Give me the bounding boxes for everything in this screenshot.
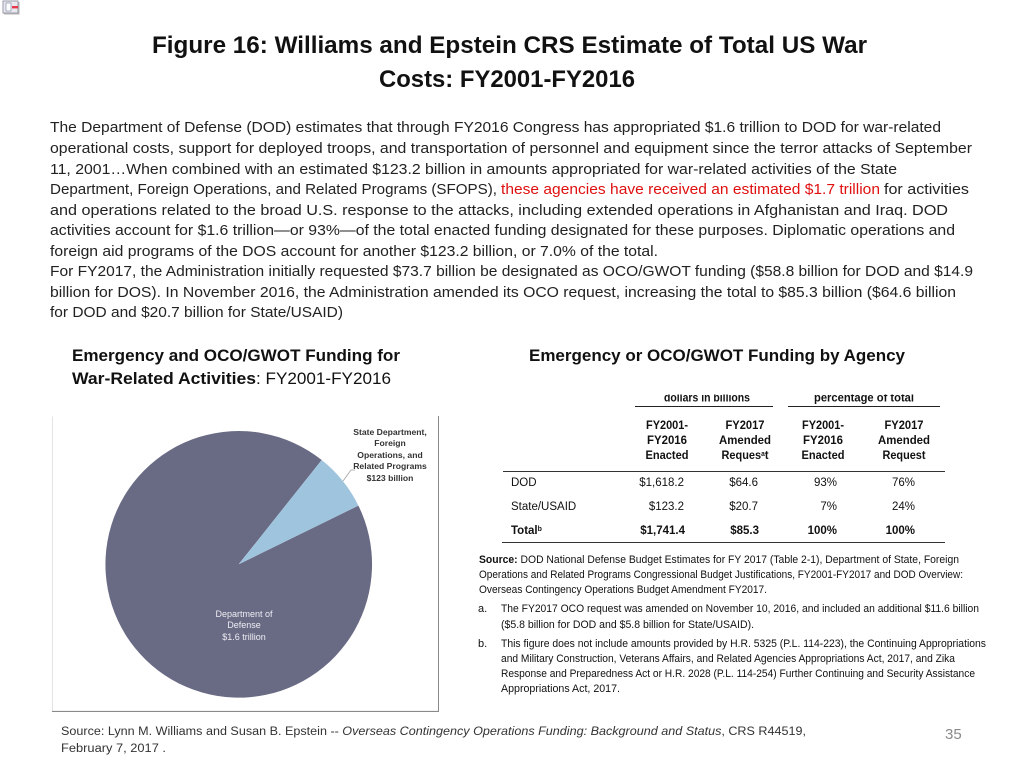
table row: Total <box>511 525 915 537</box>
label: State Department: Operations, and <box>357 450 423 460</box>
body text block: and operations related to the broad U.S. response to the attacks, including extended operations in Afghanistan and Iraq. DOD <box>50 203 948 219</box>
table column headers <box>646 420 930 462</box>
body text block: 11, 2001…When combined with an estimated $123.2 billion in amounts appropriated for war-related activities of the State <box>50 162 897 178</box>
label: State Department: State Department, <box>353 427 427 437</box>
label: Department of Defense: Department of <box>215 609 273 619</box>
title: Costs: FY2001-FY2016 <box>379 66 635 93</box>
table column headers: FY2016 <box>647 435 687 447</box>
table source notes: Response and Preparedness Act or H.R. 2028 (P.L. 114-254) Further Continuing and Security Assistance <box>501 668 975 680</box>
table source notes: Source: DOD National Defense Budget Estimates for FY 2017 (Table 2-1), Department of State, Foreign <box>479 554 959 566</box>
table source notes: ($5.8 billion for DOD and $5.8 billion for State/USAID). <box>501 619 754 631</box>
label: State Department <box>353 427 427 483</box>
title: Figure 16: Williams and Epstein CRS Estimate of Total US War <box>152 32 867 59</box>
table row: Total: 100% <box>808 525 837 537</box>
panel: pie chart <box>52 416 439 712</box>
body text block: for DOD and $20.7 billion for State/USAID) <box>50 305 343 321</box>
body text block: billion for DOS). In November 2016, the Administration amended its OCO request, increasing the total to $85.3 billion ($64.6 billion <box>50 285 956 301</box>
table source notes <box>478 554 986 695</box>
table source notes: and Military Construction, Veterans Affairs, and Related Agencies Appropriations Act, 2017, and Zika <box>501 653 956 665</box>
table row: State/USAID: $123.2 <box>649 501 684 513</box>
heading: agency table: Emergency or OCO/GWOT Funding by Agency <box>529 346 906 365</box>
table row: State/USAID: State/USAID <box>511 501 576 513</box>
pie slice: Department of Defense <box>105 431 372 698</box>
body text block: for activities <box>884 182 969 198</box>
footer source citation: February 7, 2017 . <box>61 743 166 755</box>
panel: funding table <box>502 392 945 542</box>
table row: DOD: 76% <box>892 477 915 489</box>
table column headers: FY2001- <box>802 420 844 432</box>
heading: pie chart: : FY2001-FY2016 <box>256 369 391 388</box>
table row: Total: $1,741.4 <box>640 525 686 537</box>
table row: DOD <box>511 477 915 489</box>
body text block: these agencies have received an estimated $1.7 trillion <box>501 182 880 198</box>
table column headers: FY2001- <box>646 420 688 432</box>
heading: pie chart: Emergency and OCO/GWOT Funding for <box>72 346 400 365</box>
table source notes: Operations and Related Programs Congressional Budget Justifications, FY2001-FY2017 and DOD Overview: <box>479 569 963 581</box>
table source notes: b. <box>478 638 487 650</box>
table column headers: t <box>765 450 769 462</box>
body text block: operational costs, support for deployed troops, and transportation of personnel and equipment since the terror attacks of September <box>50 141 972 157</box>
table column headers: Enacted <box>646 450 688 462</box>
body text block: Department, Foreign Operations, and Related Programs (SFOPS), <box>50 182 497 198</box>
label: State Department: Foreign <box>374 438 406 448</box>
label: State Department: Related Programs <box>353 461 427 471</box>
footer source citation <box>61 726 806 755</box>
body text block: The Department of Defense (DOD) estimates that through FY2016 Congress has appropriated $1.6 trillion to DOD for war-related <box>50 120 941 136</box>
table source notes: The FY2017 OCO request was amended on November 10, 2016, and included an additional $11.6 billion <box>501 603 979 615</box>
table row: DOD: 93% <box>814 477 837 489</box>
label: State Department: $123 billion <box>367 473 413 483</box>
label: Department of Defense: Defense <box>227 620 261 630</box>
page number: 35 <box>945 726 962 743</box>
table group headers: dollars in billions <box>664 392 750 404</box>
table source notes: a. <box>478 603 487 615</box>
table column headers: Reques <box>722 450 763 462</box>
table column headers: Request <box>882 450 926 462</box>
table source notes: Overseas Contingency Operations Budget Amendment FY2017. <box>479 584 767 596</box>
table group headers: percentage of total <box>814 392 914 404</box>
table row: Total: 100% <box>886 525 915 537</box>
table row: State/USAID <box>511 501 915 513</box>
table row: State/USAID: 24% <box>892 501 915 513</box>
table column headers: FY2017 <box>884 420 924 432</box>
table column headers: FY2016 <box>803 435 843 447</box>
heading: pie chart: War-Related Activities <box>72 369 256 388</box>
table row: Total: b <box>538 526 542 533</box>
table row: DOD: $64.6 <box>729 477 758 489</box>
footer source citation: Source: Lynn M. Williams and Susan B. Epstein -- Overseas Contingency Operations Funding: Background and Status , CRS R44519, <box>61 726 806 738</box>
table row: State/USAID: 7% <box>820 501 837 513</box>
table column headers: Amended <box>719 435 771 447</box>
table row: DOD: $1,618.2 <box>639 477 684 489</box>
pie slice: State Department <box>239 460 358 564</box>
table column headers: Enacted <box>802 450 844 462</box>
label: Department of Defense <box>215 609 273 642</box>
body text block: activities account for $1.6 trillion—or 93%—of the total enacted funding designated for these purposes. Diplomatic operations and <box>50 223 955 239</box>
table source notes: This figure does not include amounts provided by H.R. 5325 (P.L. 114-223), the Continuing Appropriations <box>501 638 986 650</box>
table group headers <box>635 394 940 407</box>
body text block: foreign aid programs of the DOS account for another $123.2 billion, or 7.0% of the total. <box>50 244 658 260</box>
table column headers: FY2017 <box>726 420 764 432</box>
leader line <box>343 470 355 481</box>
table row: State/USAID: $20.7 <box>729 501 758 513</box>
heading: pie chart <box>72 346 400 388</box>
table row: DOD: DOD <box>511 477 537 489</box>
label: Department of Defense: $1.6 trillion <box>222 632 266 642</box>
table column headers: a <box>761 451 765 458</box>
body text block <box>50 120 973 321</box>
table row: Total: Total <box>511 525 538 537</box>
icon: broken image placeholder <box>3 1 19 14</box>
body text block: For FY2017, the Administration initially requested $73.7 billion be designated as OCO/GWOT funding ($58.8 billion for DOD and $14.9 <box>50 264 973 280</box>
title <box>152 32 867 93</box>
table source notes: Appropriations Act, 2017. <box>501 683 620 695</box>
table row: Total: $85.3 <box>730 525 759 537</box>
table column headers: Amended <box>878 435 930 447</box>
